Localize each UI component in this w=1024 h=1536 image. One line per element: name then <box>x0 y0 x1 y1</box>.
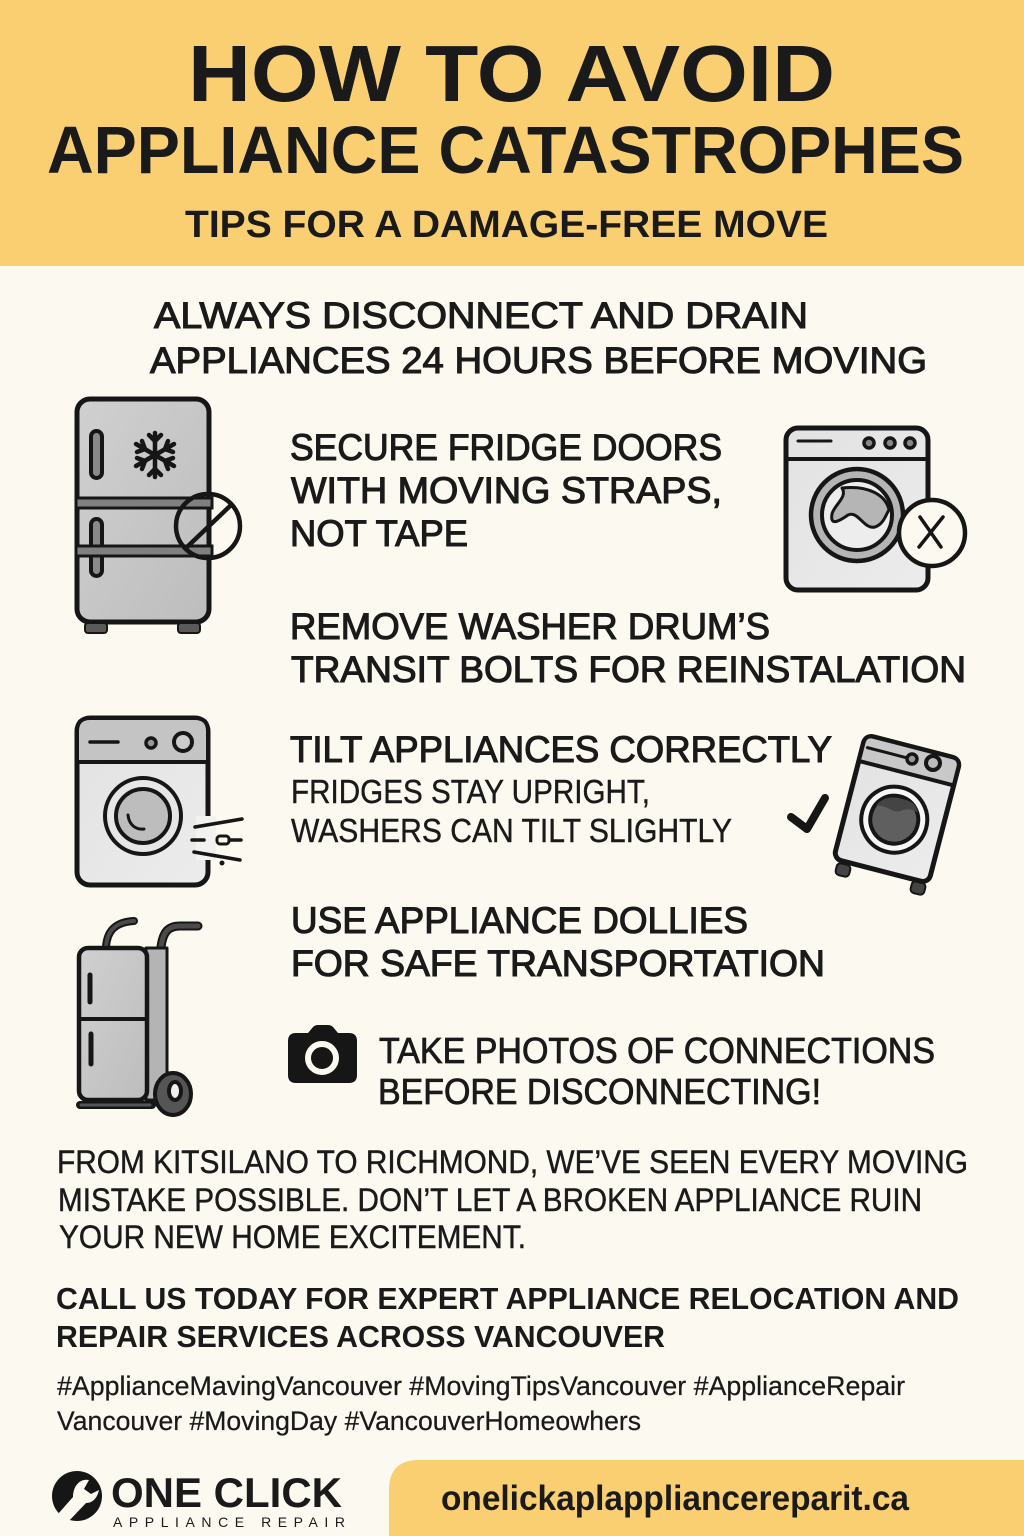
tip: use dollies: FOR SAFE TRANSPORTATION <box>291 943 825 984</box>
tip: secure fridge doors <box>290 427 722 554</box>
icon: strapped fridge with prohibition sign <box>76 399 240 633</box>
logo: One Click Appliance Repair <box>52 1469 345 1530</box>
tip: use dollies <box>291 900 825 984</box>
tip: use dollies: USE APPLIANCE DOLLIES <box>291 900 748 941</box>
title <box>47 29 964 188</box>
header banner <box>0 0 1024 266</box>
paragraph: moving mistakes <box>57 1144 968 1255</box>
tip: tilt appliances correctly <box>290 729 832 849</box>
icon: washer with loose bolts <box>77 718 242 885</box>
tip: tilt appliances correctly: FRIDGES STAY UPRIGHT, <box>291 773 650 810</box>
call to action <box>56 1281 959 1354</box>
hashtags: Vancouver #MovingDay #VancouverHomeowhers <box>57 1406 641 1436</box>
tip: secure fridge doors: SECURE FRIDGE DOORS <box>290 427 722 468</box>
tip: remove transit bolts: REMOVE WASHER DRUM’S <box>290 606 770 647</box>
tip: secure fridge doors: NOT TAPE <box>290 513 468 554</box>
subtitle: TIPS FOR A DAMAGE-FREE MOVE <box>185 204 828 246</box>
tip: take photos: TAKE PHOTOS OF CONNECTIONS <box>379 1030 935 1071</box>
icon: camera <box>288 1025 357 1083</box>
icon: fridge on dolly <box>79 921 198 1115</box>
logo: One Click Appliance Repair: APPLIANCE REPAIR <box>113 1514 345 1530</box>
paragraph: moving mistakes: YOUR NEW HOME EXCITEMENT. <box>59 1219 526 1255</box>
tip: tilt appliances correctly: WASHERS CAN TILT SLIGHTLY <box>291 812 732 849</box>
title: APPLIANCE CATASTROPHES <box>47 113 964 188</box>
icon: tilted washer <box>834 735 960 896</box>
tip: tilt appliances correctly: TILT APPLIANCES CORRECTLY <box>290 729 832 770</box>
paragraph: moving mistakes: FROM KITSILANO TO RICHMOND, WE’VE SEEN EVERY MOVING <box>57 1144 968 1180</box>
heading: disconnect and drain: APPLIANCES 24 HOURS BEFORE MOVING <box>150 340 927 381</box>
icon: check mark <box>791 798 825 829</box>
tip: remove transit bolts: TRANSIT BOLTS FOR REINSTALATION <box>291 649 966 690</box>
heading: disconnect and drain: ALWAYS DISCONNECT AND DRAIN <box>154 295 808 336</box>
title: HOW TO AVOID <box>188 29 835 118</box>
website pill: onelickaplappliancereparit.ca <box>441 1479 909 1518</box>
hashtags: #ApplianceMavingVancouver #MovingTipsVancouver #ApplianceRepair <box>57 1371 905 1401</box>
call to action: CALL US TODAY FOR EXPERT APPLIANCE RELOCATION AND <box>56 1281 959 1316</box>
website pill <box>389 1460 1024 1536</box>
call to action: REPAIR SERVICES ACROSS VANCOUVER <box>56 1319 665 1354</box>
icon: washer with X badge <box>786 428 965 590</box>
tip: remove transit bolts <box>290 606 966 690</box>
hashtags <box>57 1371 905 1436</box>
tip: take photos: BEFORE DISCONNECTING! <box>378 1071 821 1112</box>
tip: take photos <box>378 1030 935 1112</box>
heading: disconnect and drain <box>150 295 927 381</box>
paragraph: moving mistakes: MISTAKE POSSIBLE. DON’T LET A BROKEN APPLIANCE RUIN <box>58 1182 922 1218</box>
tip: secure fridge doors: WITH MOVING STRAPS, <box>291 470 722 511</box>
logo: One Click Appliance Repair: ONE CLICK <box>111 1469 342 1516</box>
